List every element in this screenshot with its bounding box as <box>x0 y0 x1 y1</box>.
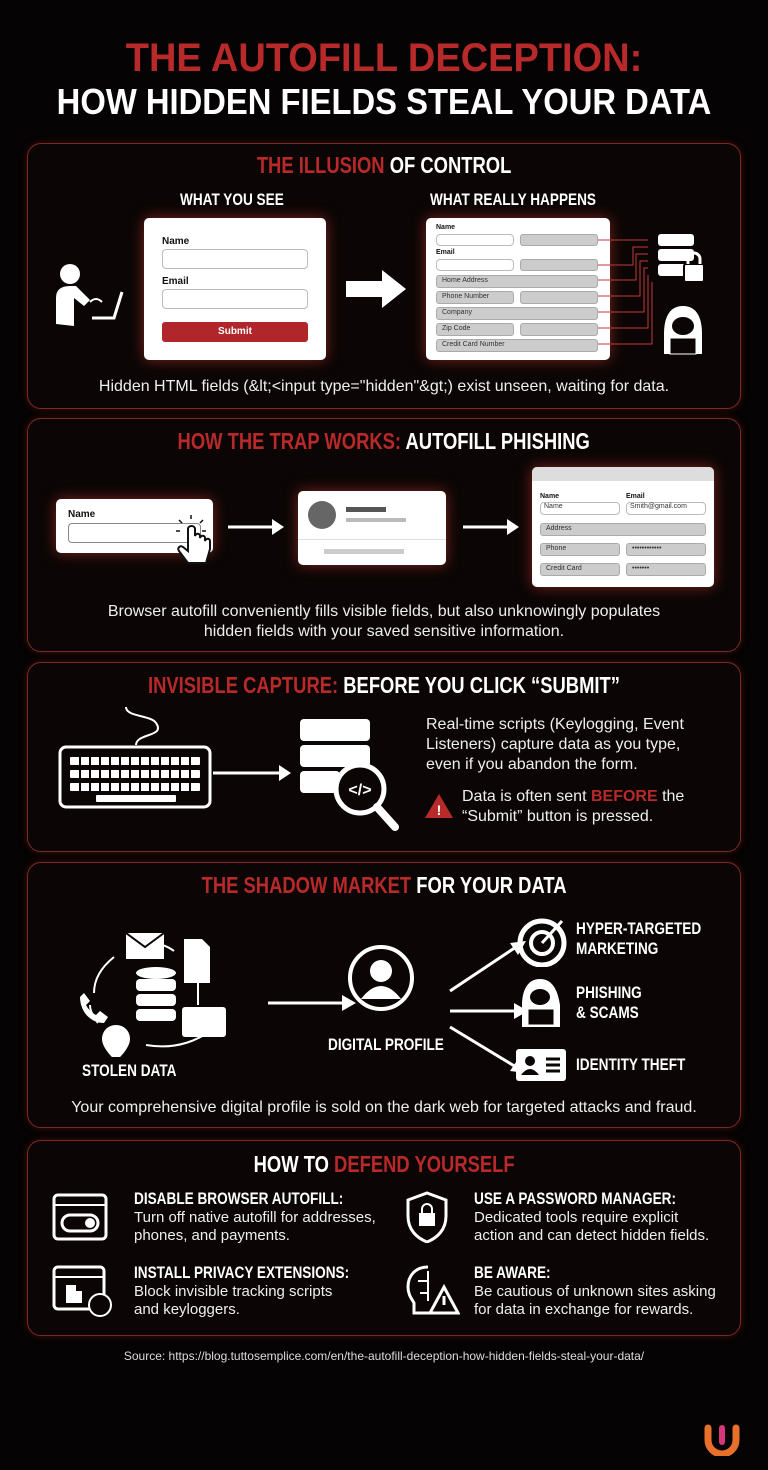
heading: INVISIBLE CAPTURE: BEFORE YOU CLICK “SUBMIT” <box>148 672 620 698</box>
arrow <box>213 765 291 781</box>
icon: warning: ! <box>437 802 441 818</box>
connector lines to server <box>598 240 652 344</box>
panel: illusion of control <box>27 143 741 409</box>
form: hidden fields: Phone Number <box>442 293 489 300</box>
browser window filled: •••••••••••• <box>632 545 661 552</box>
arrow to profile <box>268 995 356 1011</box>
form: hidden fields: Home Address <box>442 277 488 284</box>
icon: keyboard <box>58 707 212 808</box>
icon: logo <box>704 1424 740 1456</box>
arrow <box>463 519 519 535</box>
form: what you see: Submit <box>218 326 252 337</box>
digital profile: DIGITAL PROFILE <box>328 1035 444 1054</box>
panel: how the trap works <box>27 418 741 652</box>
form: hidden fields: Email <box>436 249 455 256</box>
heading: THE ILLUSION OF CONTROL <box>257 152 511 178</box>
tip: password manager: Dedicated tools require explicit <box>474 1209 678 1226</box>
panel: shadow market <box>27 862 741 1128</box>
arrow <box>228 519 284 535</box>
caption: hidden fields with your saved sensitive information. <box>204 623 564 640</box>
icon: hacker <box>664 306 702 354</box>
arrow <box>346 270 406 308</box>
tip: privacy extensions: and keyloggers. <box>134 1301 240 1318</box>
label: STOLEN DATA <box>82 1061 176 1080</box>
caption: Browser autofill conveniently fills visible fields, but also unknowingly populates <box>108 603 660 620</box>
tip: password manager: USE A PASSWORD MANAGER: <box>474 1189 676 1208</box>
name field with cursor <box>56 499 213 553</box>
subheading: what you see: WHAT YOU SEE <box>180 190 284 209</box>
heading: HOW THE TRAP WORKS: AUTOFILL PHISHING <box>178 428 590 454</box>
form: what you see: Email <box>162 276 189 287</box>
browser window filled: Credit Card <box>546 565 582 572</box>
tip: disable autofill: Turn off native autofill for addresses, <box>134 1209 376 1226</box>
tip: disable autofill: DISABLE BROWSER AUTOFILL: <box>134 1189 343 1208</box>
icon: warning <box>425 794 453 818</box>
tip: be aware: for data in exchange for rewards. <box>474 1301 693 1318</box>
caption: Hidden HTML fields (&lt;<input type="hidden"&gt;) exist unseen, waiting for data. <box>99 378 669 395</box>
browser window filled: ••••••• <box>632 565 649 572</box>
name field with cursor: Name <box>68 509 95 520</box>
heading: HOW TO DEFEND YOURSELF <box>253 1151 515 1177</box>
tip: password manager: action and can detect hidden fields. <box>474 1227 709 1244</box>
tip: be aware: Be cautious of unknown sites asking <box>474 1283 716 1300</box>
browser window filled: Address <box>546 525 572 532</box>
icon: user at laptop <box>56 264 124 326</box>
form: hidden fields: Name <box>436 224 455 231</box>
outcome: marketing: HYPER-TARGETED <box>576 919 701 938</box>
browser window filled: Email <box>626 493 645 500</box>
icon: server with magnifier: </> <box>348 782 372 799</box>
form: hidden fields <box>426 218 610 360</box>
outcome: phishing: & SCAMS <box>576 1003 639 1022</box>
title <box>57 36 711 122</box>
browser window filled: Phone <box>546 545 566 552</box>
tip: disable autofill <box>52 1189 376 1244</box>
browser window filled: Smith@gmail.com <box>630 503 687 510</box>
autofill popup <box>298 491 446 565</box>
caption: Your comprehensive digital profile is sold on the dark web for targeted attacks and fraud. <box>71 1099 697 1116</box>
form: hidden fields: Zip Code <box>442 325 470 332</box>
outcome: phishing <box>522 979 642 1027</box>
outcome: marketing <box>518 918 701 967</box>
panel: invisible capture <box>27 662 741 852</box>
form: hidden fields: Credit Card Number <box>442 341 505 348</box>
warning: Data is often sent BEFORE the “Submit” button is pressed. <box>462 788 684 825</box>
title: THE AUTOFILL DECEPTION: <box>126 36 642 80</box>
outcome: marketing: MARKETING <box>576 939 658 958</box>
form: what you see <box>144 218 326 360</box>
browser window filled <box>532 467 714 587</box>
panel: defend yourself <box>27 1140 741 1336</box>
browser window filled: Name <box>540 493 559 500</box>
form: hidden fields: Company <box>442 309 472 316</box>
tip: disable autofill: phones, and payments. <box>134 1227 290 1244</box>
stolen data cluster <box>80 933 226 1080</box>
tip: password manager <box>406 1189 709 1244</box>
source text: Source: https://blog.tuttosemplice.com/en/the-autofill-deception-how-hidden-fields-steal-your-data/ <box>124 1349 644 1363</box>
outcome: identity theft <box>516 1049 686 1081</box>
caption <box>108 603 660 640</box>
heading: THE SHADOW MARKET FOR YOUR DATA <box>202 872 566 898</box>
icon: server with lock <box>658 234 703 281</box>
tip: be aware <box>406 1263 716 1318</box>
subheading: what really happens: WHAT REALLY HAPPENS <box>430 190 596 209</box>
outcome: phishing: PHISHING <box>576 983 642 1002</box>
tip: privacy extensions <box>52 1263 349 1318</box>
icon: server with magnifier <box>300 719 399 831</box>
digital profile <box>328 945 444 1054</box>
outcome: identity theft: IDENTITY THEFT <box>576 1055 685 1074</box>
tip: privacy extensions: Block invisible tracking scripts <box>134 1283 332 1300</box>
tip: be aware: BE AWARE: <box>474 1263 551 1282</box>
title: HOW HIDDEN FIELDS STEAL YOUR DATA <box>57 81 711 122</box>
tip: privacy extensions: INSTALL PRIVACY EXTENSIONS: <box>134 1263 349 1282</box>
form: what you see: Name <box>162 236 189 247</box>
browser window filled: Name <box>544 503 563 510</box>
branching arrows <box>449 941 526 1072</box>
text block: scripts: Real-time scripts (Keylogging, Event Listeners) capture data as you type, even if you abandon the form. <box>426 716 684 773</box>
